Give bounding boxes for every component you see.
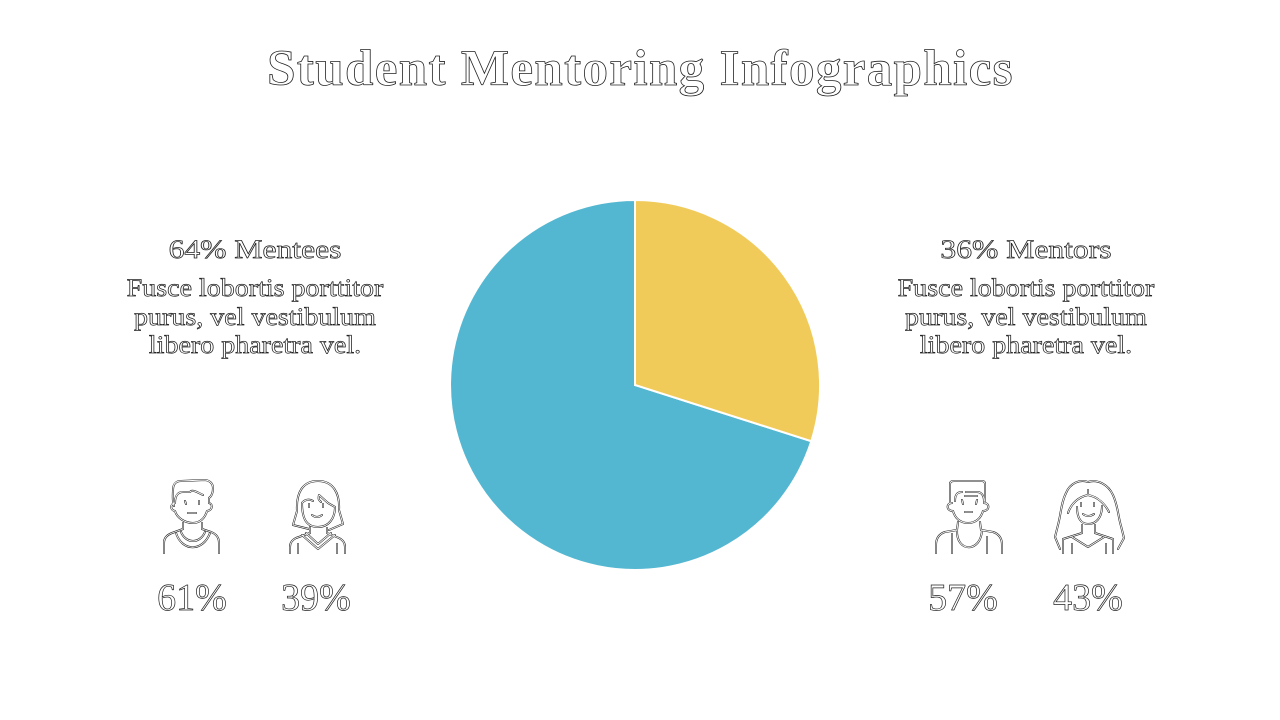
mentors text: libero pharetra vel. [920,332,1132,359]
stat: 39%: 39% [281,577,351,619]
slice: mentors [635,200,820,441]
pie chart [451,201,820,569]
stat: 61%: 61% [157,577,227,619]
mentors text [898,275,1154,359]
mentors heading: 36% Mentors [940,235,1112,264]
stat: 57%: 57% [928,577,998,619]
mentees text: libero pharetra vel. [149,332,361,359]
mentees heading: 64% Mentees [169,235,341,264]
mentors text: purus, vel vestibulum [905,304,1147,330]
icon: male mentee [163,479,220,554]
panel: mentors [898,235,1154,359]
icon: male mentor [935,480,1003,554]
panel: mentees [127,235,384,359]
icon: female mentee [289,480,346,554]
mentees text: Fusce lobortis porttitor [127,275,383,302]
slice: mentees [450,200,811,570]
icon: female mentor [1054,480,1125,554]
title: Student Mentoring Infographics [267,41,1014,97]
mentees text: purus, vel vestibulum [134,304,376,330]
mentees text [127,275,384,359]
stat: 43%: 43% [1053,577,1123,619]
mentors text: Fusce lobortis porttitor [898,275,1154,302]
